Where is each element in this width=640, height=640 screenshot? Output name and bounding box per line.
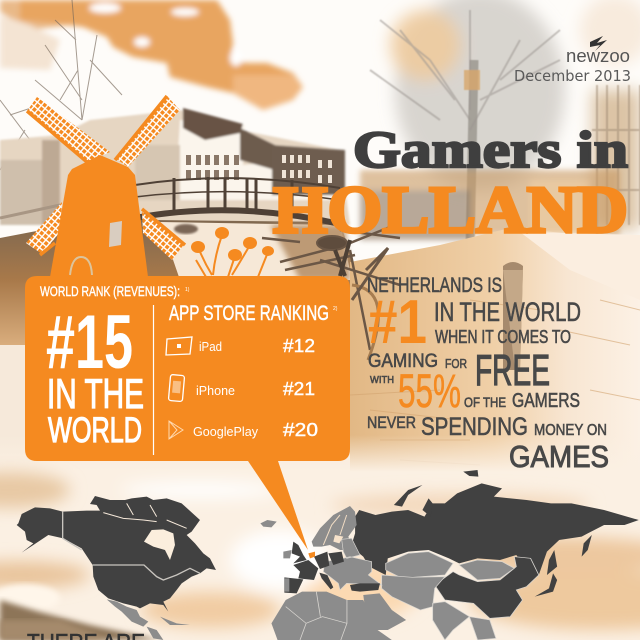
buildings [0, 108, 350, 225]
line: when it comes to: WHEN IT COMES TO [435, 327, 571, 347]
icon: windmill [26, 96, 185, 277]
lower clouds [0, 345, 640, 640]
right side buildings [592, 85, 640, 240]
Turkey [350, 583, 380, 592]
UK [292, 542, 307, 563]
line: gaming: GAMING [368, 351, 438, 372]
Arabia [363, 593, 406, 630]
street trees [360, 170, 620, 240]
Iceland [260, 520, 277, 527]
55%: 55% [398, 364, 461, 417]
east Europe [323, 538, 382, 590]
road [350, 228, 640, 500]
line: in the world: IN THE WORLD [434, 297, 581, 327]
header: newzoo logo [566, 36, 630, 66]
world map [17, 470, 639, 640]
line: Netherlands is: NETHERLANDS IS [367, 274, 502, 297]
bollard [503, 262, 523, 370]
Central and South Asia [382, 575, 496, 640]
date: December 2013 [514, 67, 631, 85]
GooglePlay rank: #20 [283, 420, 318, 440]
Africa [271, 592, 392, 640]
icon: tulips [191, 227, 274, 277]
icon: Google Play [169, 421, 183, 439]
line: gamers: GAMERS [512, 390, 580, 412]
#1: #1 [368, 288, 427, 357]
title: Gamers in: Gamers in [353, 122, 628, 179]
Kazakhstan [386, 552, 453, 578]
line: games: GAMES [509, 439, 609, 474]
Europe detail [283, 506, 382, 593]
Spain [284, 577, 303, 593]
tree trunk and lamp [370, 10, 560, 250]
windmill tower [50, 155, 148, 277]
road cobbles [350, 300, 640, 465]
France [293, 560, 318, 580]
sky clouds [0, 0, 303, 110]
North America [17, 496, 216, 640]
world: WORLD [48, 411, 142, 450]
left tree [0, 0, 122, 170]
Netherlands highlight [308, 552, 315, 558]
GooglePlay label: GooglePlay [193, 424, 258, 439]
bridge [135, 177, 340, 224]
icon: iPad [166, 337, 192, 355]
iPad rank: #12 [283, 336, 315, 356]
line: of the: OF THE [464, 395, 506, 410]
windmill door [70, 257, 92, 275]
divider [152, 305, 154, 455]
line: never: NEVER [367, 413, 416, 432]
line: money on: MONEY ON [534, 422, 607, 439]
Italy [319, 573, 333, 589]
dark hill [0, 600, 160, 640]
iPad label: iPad [199, 339, 222, 354]
line: spending: SPENDING [421, 413, 528, 441]
footnote 2: 2) [333, 306, 338, 312]
canal water [0, 215, 365, 345]
title: HOLLAND: HOLLAND [273, 173, 628, 247]
newzoo wordmark: newzoo [566, 46, 630, 66]
icon: newzoo mark [590, 36, 607, 51]
Germany [314, 552, 329, 569]
#15: #15 [46, 300, 133, 385]
Ireland [283, 550, 292, 558]
line: free: FREE [475, 346, 550, 395]
bubble shape [25, 276, 350, 550]
text block: Netherlands statement [367, 274, 609, 474]
iPhone rank: #21 [283, 379, 315, 399]
Portugal [284, 578, 289, 592]
windmill sails [27, 97, 110, 162]
right side tree haze [390, 0, 640, 230]
callout: speech bubble [25, 276, 350, 550]
building windows [186, 155, 239, 180]
left rail [0, 205, 60, 218]
world rank label: WORLD RANK (REVENUES): [40, 284, 180, 299]
China [435, 557, 539, 618]
app store heading: APP STORE RANKING [169, 302, 329, 325]
Russia [351, 483, 639, 575]
line: with: WITH [370, 375, 394, 386]
Mongolia [459, 560, 514, 580]
icon: iPhone [168, 374, 185, 402]
in the: IN THE [47, 370, 144, 417]
Europe, Middle East, Africa [260, 470, 639, 640]
bicycles [130, 225, 400, 490]
windmill window [109, 221, 122, 247]
footnote 1: 1) [185, 287, 190, 293]
iPhone label: iPhone [196, 383, 235, 398]
line: for: FOR [445, 356, 467, 371]
Poland [328, 552, 344, 565]
